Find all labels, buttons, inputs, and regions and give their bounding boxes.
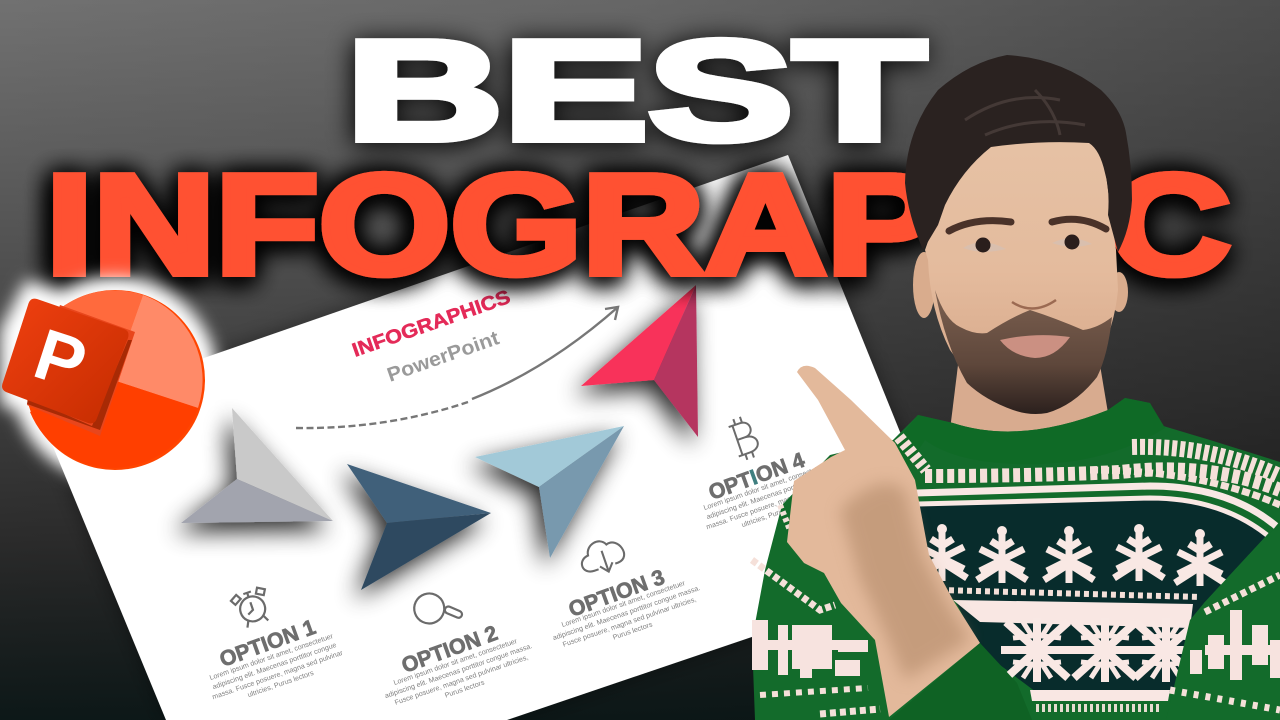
cuff (889, 643, 1032, 720)
title: BEST: BEST (346, 12, 926, 170)
option 2 label: adipiscing elit. Maecenas porttitor congue massa. (384, 642, 533, 700)
arm hair shading (840, 483, 970, 680)
title: INFOGRAPHIC: INFOGRAPHIC (46, 146, 1231, 304)
icon: PowerPoint logo: P (25, 314, 95, 405)
hair (905, 55, 1132, 252)
option 3 label: Purus lectors (612, 620, 654, 642)
option 1 label: Lorem ipsum dolor sit amet, consectetuer (209, 632, 335, 682)
collar (896, 398, 1165, 470)
left sleeve pattern (752, 560, 835, 610)
pattern band: upper dots (899, 437, 1280, 505)
growth curve arrow (296, 307, 618, 428)
option 2 label: Fusce posuere, magna sed pulvinar ultricies, (394, 653, 529, 707)
lower white line (1030, 690, 1170, 701)
mouth (1000, 335, 1070, 358)
eyes (963, 234, 1092, 252)
slide heading: INFOGRAPHICS (349, 286, 513, 362)
right sleeve (1166, 525, 1280, 720)
pale band (953, 600, 1193, 628)
option 4 label: adipiscing elit. Maecenas porttitor congue (705, 471, 831, 521)
option 3 label (549, 565, 707, 660)
person (752, 55, 1280, 720)
option 1 label: ultricies, Purus lectors (247, 669, 315, 699)
trees (917, 524, 967, 581)
ears (913, 252, 1128, 318)
icon: PowerPoint logo (0, 277, 218, 483)
arrow: gray (181, 408, 333, 523)
icon: magnifier (410, 584, 465, 632)
beard (935, 290, 1112, 414)
option 1 label: OPTION 1 (216, 615, 319, 672)
arrow: red (581, 285, 698, 437)
option 3 label: Fusce posuere, magna sed pulvinar ultricies, (562, 595, 697, 649)
infographic slide (40, 155, 955, 720)
icon: bitcoin (727, 414, 762, 462)
option 4 label: massa. Fusce posuere, magna sed pulvinar (705, 479, 838, 531)
option 3 label: Lorem ipsum dolor sit amet, consectetuer (561, 579, 687, 629)
hair highlights (965, 90, 1085, 135)
face (925, 130, 1118, 412)
option 3 label: adipiscing elit. Maecenas porttitor congue massa. (552, 584, 701, 642)
icon: alarm clock (230, 585, 275, 630)
option 4 label: OPTION 4 (705, 448, 808, 505)
slide heading: PowerPoint (384, 327, 502, 387)
option 1 label (205, 615, 348, 710)
option 4 label: Lorem ipsum dolor sit amet, consectetuer (703, 462, 829, 512)
icon: cloud download (576, 534, 628, 579)
option 2 label: Purus lectors (444, 678, 486, 700)
hand with pointing finger (787, 366, 980, 717)
nose (1012, 300, 1056, 309)
option 1 label: adipiscing elit. Maecenas porttitor congue (211, 641, 337, 691)
arrow: light blue (475, 426, 624, 558)
option 3 label: OPTION 3 (565, 565, 668, 622)
snowflakes (1001, 618, 1073, 682)
eyebrows (949, 219, 1106, 231)
option 1 label: massa. Fusce posuere, magna sed pulvinar (211, 649, 344, 701)
option 2 label: OPTION 2 (398, 621, 501, 678)
dotted row (940, 590, 1200, 597)
scalloped white line (918, 498, 1267, 535)
dark band with trees (919, 498, 1267, 695)
option 2 label: Lorem ipsum dolor sit amet, consectetuer (393, 637, 519, 687)
option 4 label (699, 448, 842, 540)
sweater (752, 398, 1280, 720)
option 4 label: ultricies, Purus lectors (741, 499, 809, 529)
slide heading (349, 286, 513, 387)
arrow: navy (347, 464, 491, 590)
option 2 label (381, 621, 539, 718)
neck (950, 365, 1110, 450)
